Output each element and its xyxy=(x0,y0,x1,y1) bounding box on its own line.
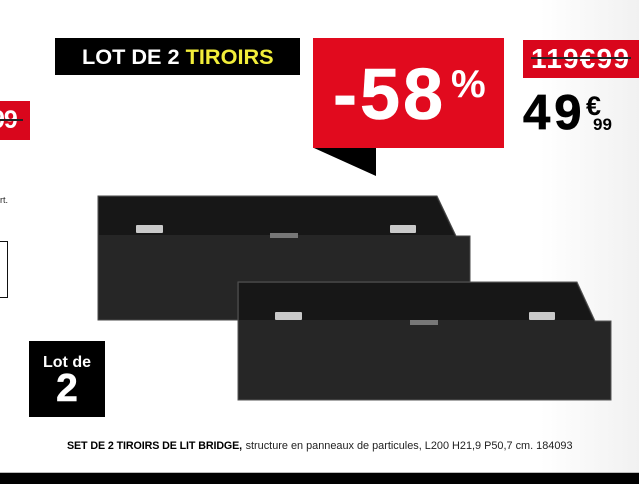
product description: SET DE 2 TIROIRS DE LIT BRIDGE, structure en panneaux de particules, L200 H21,9 P50,7 cm. 184093 xyxy=(67,440,573,452)
discount badge: % xyxy=(451,63,486,106)
euro sign: € xyxy=(586,91,601,121)
old price xyxy=(523,40,639,78)
drawer: back xyxy=(98,196,470,320)
lot badge xyxy=(29,341,105,417)
left red price fragment xyxy=(0,101,30,140)
price cents: 99 xyxy=(593,115,612,134)
ribbon fold xyxy=(314,148,376,176)
lot number: 2 xyxy=(56,367,78,410)
left text fragment: rt. xyxy=(0,195,8,205)
price euros: 49 xyxy=(523,86,586,140)
heading banner xyxy=(55,38,300,75)
old price: 119€99 xyxy=(531,43,630,74)
new price xyxy=(523,86,612,140)
heading banner: LOT DE 2 TIROIRS xyxy=(82,44,274,69)
discount value: -58 xyxy=(333,55,446,135)
left outlined box fragment xyxy=(0,241,8,298)
lot label: Lot de xyxy=(43,354,91,371)
footer bar xyxy=(0,472,639,484)
discount badge xyxy=(313,38,504,148)
drawer: front xyxy=(238,282,611,400)
